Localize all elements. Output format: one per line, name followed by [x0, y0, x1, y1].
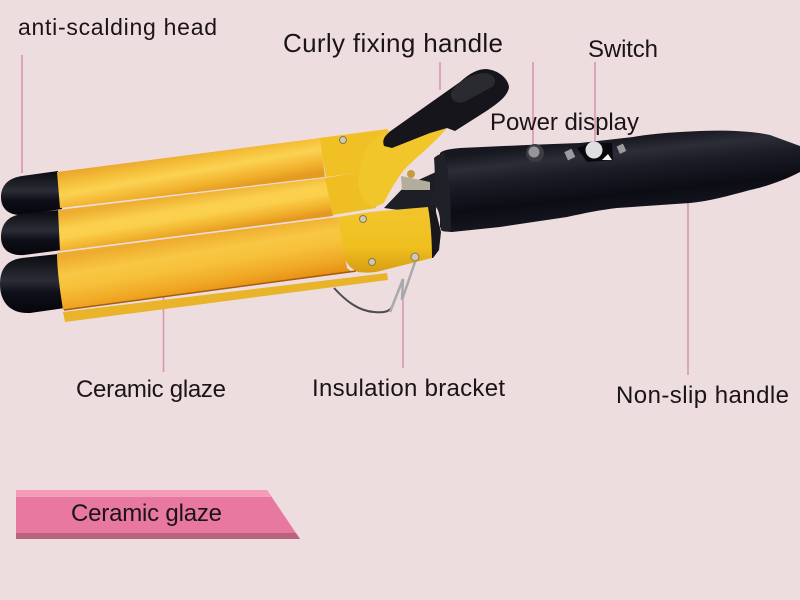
bottom barrel — [57, 217, 355, 310]
middle barrel — [58, 178, 333, 251]
banner text: Ceramic glaze — [71, 500, 222, 527]
wire insulation bracket — [334, 262, 415, 312]
banner: ceramic glaze — [16, 490, 300, 539]
black clamp lever — [383, 69, 509, 148]
rear yellow sleeve — [319, 129, 388, 177]
label: insulation bracket: Insulation bracket — [312, 375, 505, 402]
front sleeve — [338, 207, 432, 273]
handle body — [440, 131, 800, 232]
dark neck — [384, 172, 436, 232]
label: ceramic glaze: Ceramic glaze — [76, 376, 226, 403]
shadow under barrel — [64, 271, 356, 310]
curling iron illustration — [0, 69, 800, 322]
label: anti-scalding head: anti-scalding head — [18, 14, 217, 40]
rotary switch — [564, 142, 626, 162]
icon: heat-proof black tips — [0, 171, 65, 313]
label: non-slip handle: Non-slip handle — [616, 382, 789, 409]
metal contact — [401, 176, 430, 190]
rail — [63, 273, 388, 322]
power indicator — [526, 144, 544, 162]
leader lines — [22, 55, 688, 375]
rear middle sleeve — [324, 170, 376, 215]
handle collar — [430, 152, 451, 232]
label: curly fixing handle: Curly fixing handle — [283, 28, 503, 58]
rivets — [340, 136, 419, 266]
label: power display: Power display — [490, 109, 639, 136]
label: switch: Switch — [588, 36, 658, 63]
yellow arm — [358, 128, 447, 208]
dark ring behind front sleeve — [426, 207, 441, 258]
top barrel — [57, 138, 325, 208]
